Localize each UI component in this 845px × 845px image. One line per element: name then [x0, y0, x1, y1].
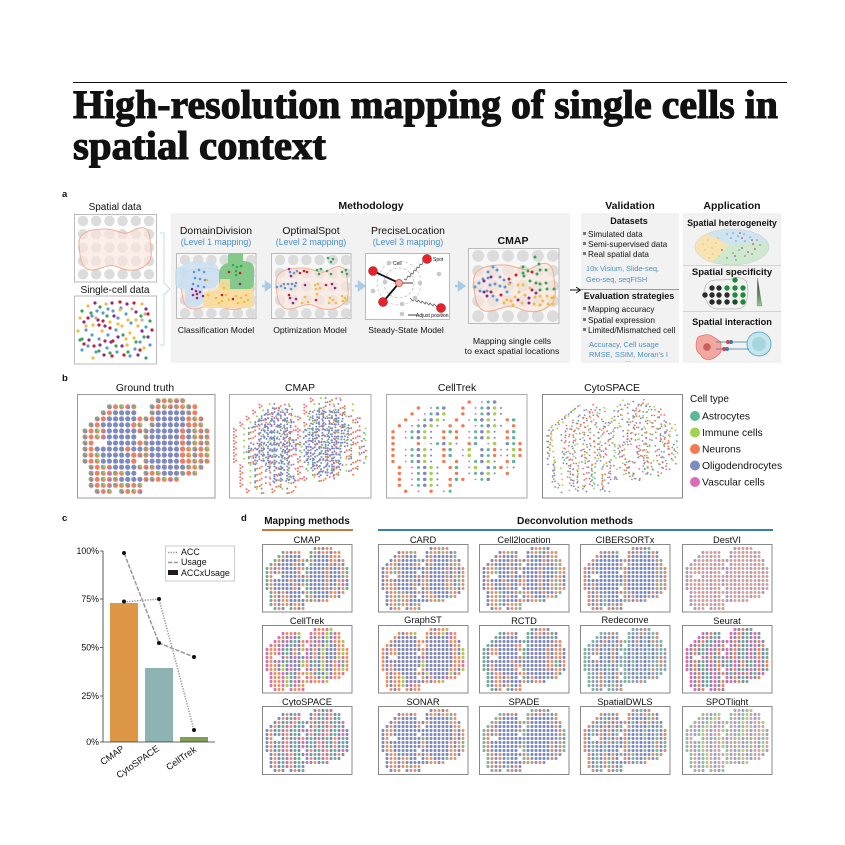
step: precise location: PreciseLocation [371, 226, 445, 237]
map: CMAP [230, 383, 371, 498]
map: CIBERSORTx: CIBERSORTx [596, 535, 655, 545]
panel: application [683, 213, 781, 363]
map: DestVI [682, 535, 772, 612]
map: SONAR: SONAR [406, 697, 440, 707]
legend: cell type [690, 394, 782, 488]
panel: validation [581, 213, 679, 364]
map: CytoSPACE: CytoSPACE [584, 383, 640, 394]
map: SONAR [378, 697, 468, 774]
chart legend [166, 546, 234, 581]
map: Seurat [682, 616, 772, 693]
axes: 100% [76, 546, 99, 556]
step: precise location: Cell [393, 261, 402, 267]
panel label b: b [62, 373, 68, 384]
legend: cell type: Vascular cells [702, 478, 765, 488]
panel: validation: Semi-supervised data [588, 240, 668, 249]
map: CytoSPACE: CytoSPACE [282, 697, 332, 707]
infographic [62, 82, 787, 778]
arrow [262, 282, 271, 290]
spatial data input: Spatial data [89, 202, 142, 213]
map: CellTrek: CellTrek [438, 383, 477, 394]
application: spatial specificity: Spatial specificity [692, 267, 773, 278]
step: CMAP result: Mapping single cells [473, 336, 552, 346]
legend: cell type: Oligodendrocytes [702, 461, 782, 472]
panel: validation: Spatial expression [588, 316, 655, 325]
title: High-resolution mapping of single cells in [73, 82, 778, 127]
map: CARD [378, 535, 468, 612]
panel label a: a [62, 189, 68, 200]
step: domain division [175, 226, 256, 335]
panel: validation: Evaluation strategies [584, 291, 674, 301]
map: Cell2location: Cell2location [497, 535, 551, 545]
line: ACC [122, 597, 196, 732]
map: Cell2location [480, 535, 569, 612]
panel b: spatial maps of cell types [62, 373, 782, 498]
map: SPOTlight: SPOTlight [706, 697, 749, 707]
axes: CMAP [98, 743, 126, 767]
map: SpatialDWLS: SpatialDWLS [597, 697, 653, 707]
legend: cell type: Cell type [690, 394, 729, 405]
map: CellTrek [386, 383, 527, 498]
bracket: inputs to methodology [160, 233, 170, 345]
step: CMAP result [465, 235, 560, 356]
map: RCTD: RCTD [511, 616, 537, 626]
map: ground truth [78, 383, 215, 498]
map: CARD: CARD [410, 535, 436, 545]
map: CellTrek: CellTrek [290, 616, 324, 626]
chart legend: ACC [181, 547, 200, 557]
step: precise location: Adjust position [416, 313, 449, 319]
validation heading: Validation [605, 200, 655, 212]
map: GraphST [378, 615, 468, 693]
map: SPOTlight [682, 697, 772, 774]
axes: CytoSPACE [114, 743, 161, 780]
map: CellTrek [262, 616, 352, 693]
map: CytoSPACE [262, 697, 352, 774]
arrow to validation [570, 287, 580, 293]
panel c: accuracy and usage chart [62, 513, 234, 780]
map: CIBERSORTx [580, 535, 670, 612]
step: precise location: Steady-State Model [368, 325, 444, 335]
map: CMAP [262, 535, 352, 612]
step: precise location: Spot [433, 257, 444, 263]
step: precise location [366, 226, 450, 335]
panel label d: d [241, 513, 247, 524]
single-cell data input [74, 285, 156, 364]
heading: mapping methods: Mapping methods [264, 516, 350, 527]
map: CMAP: CMAP [285, 383, 315, 394]
chart legend: ACCxUsage [181, 568, 230, 578]
step: domain division: (Level 1 mapping) [181, 237, 251, 247]
map: SPADE: SPADE [509, 697, 539, 707]
map: DestVI: DestVI [713, 535, 741, 545]
application: spatial heterogeneity: Spatial heterogeneity [687, 218, 777, 228]
panel label c: c [62, 513, 67, 524]
single-cell data input: Single-cell data [80, 285, 150, 296]
application: spatial interaction [692, 317, 772, 360]
axes: CellTrek [164, 744, 198, 772]
map: ground truth: Ground truth [116, 383, 174, 394]
title [73, 82, 787, 168]
axes [76, 546, 215, 780]
application: spatial interaction: Spatial interaction [692, 317, 772, 327]
legend: cell type: Astrocytes [702, 412, 750, 422]
panel: validation: Accuracy, Cell usage [589, 340, 659, 349]
panel: validation: 10x Visium, Slide-seq, [586, 264, 659, 273]
map: CMAP: CMAP [294, 535, 320, 545]
step: CMAP result: CMAP [498, 235, 528, 247]
bars [110, 603, 208, 742]
step: optimal spot [272, 226, 351, 335]
panel: validation: Real spatial data [588, 250, 649, 259]
spatial data input [74, 202, 156, 282]
arrow [355, 282, 364, 290]
panel: validation: Datasets [610, 216, 648, 226]
axes: 0% [86, 737, 99, 747]
panel: methodology [171, 213, 570, 363]
heading: mapping methods [262, 516, 353, 531]
map: GraphST: GraphST [404, 615, 442, 625]
step: optimal spot: OptimalSpot [282, 226, 340, 237]
step: domain division: Classification Model [178, 325, 254, 335]
panel d: method comparison [241, 513, 773, 774]
arrow [455, 282, 464, 290]
line: Usage [122, 551, 196, 659]
chart legend: Usage [181, 557, 207, 567]
step: optimal spot: (Level 2 mapping) [276, 237, 346, 247]
axes: 50% [81, 642, 99, 652]
panel: validation: Geo-seq, seqFISH [586, 275, 647, 284]
legend: cell type: Immune cells [702, 428, 763, 439]
map: SpatialDWLS [580, 697, 670, 774]
step: domain division: DomainDivision [180, 226, 252, 237]
application: spatial heterogeneity [683, 220, 781, 266]
panel: validation: Simulated data [588, 230, 643, 239]
axes: 25% [81, 691, 99, 701]
title: spatial context [73, 123, 327, 168]
panel: validation: ... [625, 355, 631, 364]
map: RCTD [480, 616, 569, 693]
step: precise location: (Level 3 mapping) [373, 237, 443, 247]
map: SPADE [480, 697, 569, 774]
methodology heading: Methodology [338, 200, 404, 212]
map: CytoSPACE [542, 383, 682, 498]
panel: validation: RMSE, SSIM, Moran's I [589, 350, 668, 359]
map: Redeconve: Redeconve [601, 615, 649, 625]
step: optimal spot: Optimization Model [273, 325, 347, 335]
legend: cell type: Neurons [702, 444, 741, 456]
panel: validation: Limited/Mismatched cell [588, 326, 676, 335]
step: CMAP result: to exact spatial locations [465, 346, 560, 356]
heading: deconvolution methods: Deconvolution methods [517, 516, 633, 527]
panel: validation: Mapping accuracy [588, 305, 655, 314]
application heading: Application [703, 200, 761, 212]
panel a: workflow [62, 189, 781, 364]
axes: 75% [81, 594, 99, 604]
application: spatial specificity [683, 267, 781, 312]
map: Seurat: Seurat [713, 616, 741, 626]
map: Redeconve [580, 615, 670, 693]
